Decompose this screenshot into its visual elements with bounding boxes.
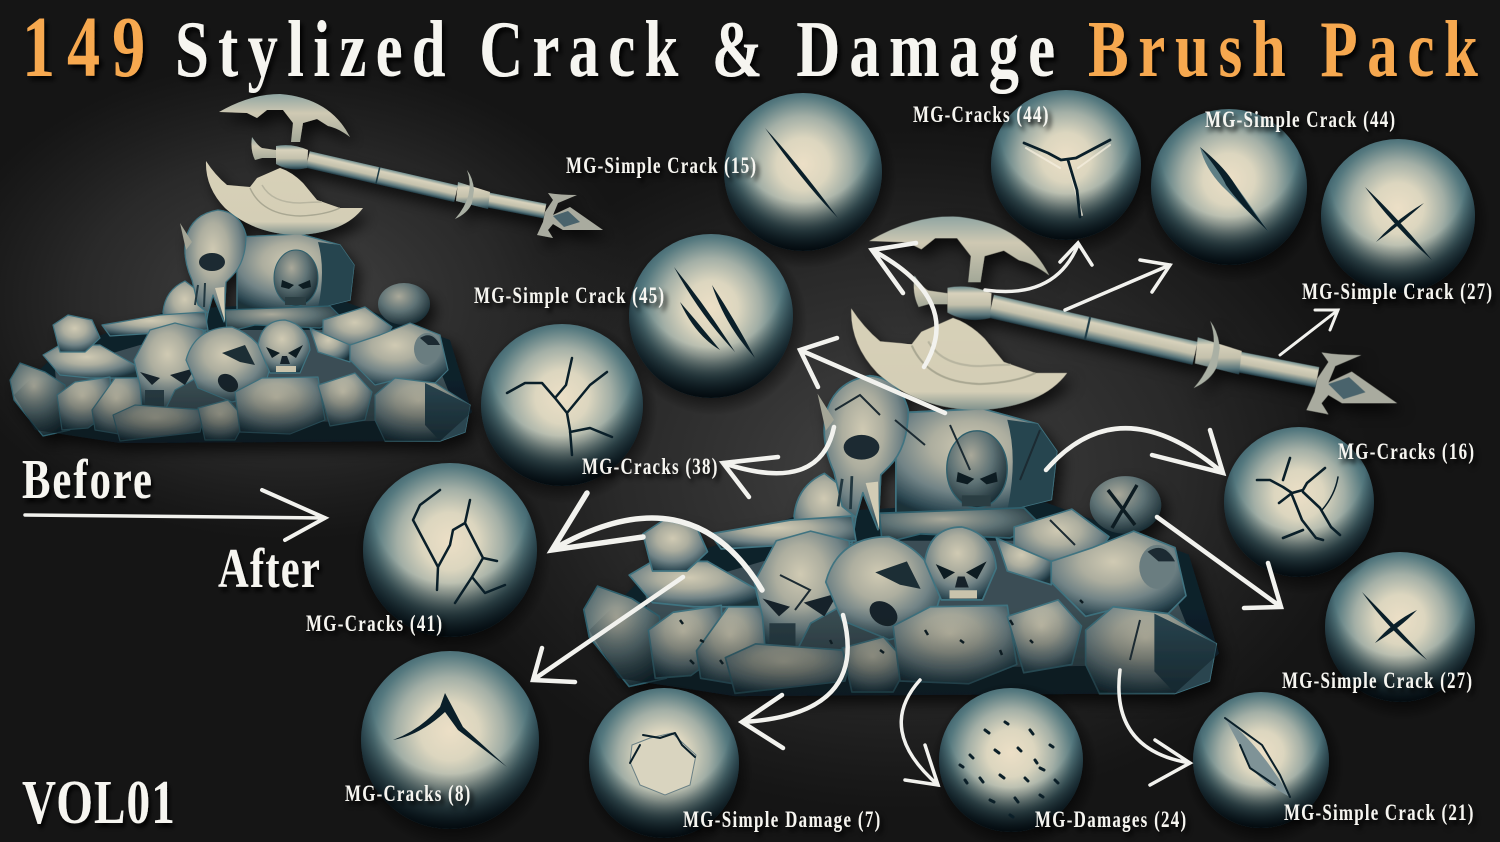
brush labels: MG-Cracks (16) <box>1338 439 1474 465</box>
after model: axe and skull pile with damage <box>584 216 1397 696</box>
sphere: cracks 41 <box>355 459 551 655</box>
sphere: simple crack 44 <box>1143 104 1321 282</box>
brush labels <box>306 102 1492 833</box>
sphere: simple damage 7 <box>582 684 752 842</box>
sphere: cracks 38 <box>473 319 657 503</box>
brush labels: MG-Simple Crack (27) <box>1282 668 1472 694</box>
brush labels: MG-Simple Damage (7) <box>683 807 880 833</box>
title: Stylized Crack & Damage <box>175 6 1055 94</box>
sphere: simple crack 15 <box>716 88 896 268</box>
sphere: cracks 16 <box>1216 422 1388 594</box>
volume label: VOL01 <box>22 768 175 837</box>
title: 149 <box>22 0 145 95</box>
sphere: cracks 44 <box>983 85 1155 257</box>
sphere: simple crack 21 <box>1185 687 1343 842</box>
brush labels: MG-Simple Crack (15) <box>566 153 756 179</box>
brush labels: MG-Simple Crack (44) <box>1205 107 1395 133</box>
brush labels: MG-Simple Crack (21) <box>1284 800 1473 826</box>
brush labels: MG-Damages (24) <box>1035 807 1186 833</box>
brush labels: MG-Simple Crack (45) <box>474 283 664 309</box>
before to after arrow <box>25 490 325 540</box>
brush labels: MG-Cracks (8) <box>345 781 470 807</box>
sphere: damages 24 <box>931 683 1097 842</box>
brush labels: MG-Cracks (44) <box>913 102 1048 128</box>
sphere: simple crack 27 lower <box>1317 547 1489 719</box>
before heading: Before <box>22 448 152 510</box>
sphere: simple crack 45 <box>621 229 807 415</box>
title: Brush Pack <box>1088 6 1478 94</box>
before model: axe and skull pile <box>10 94 603 443</box>
title <box>22 0 1478 95</box>
sphere: simple crack 27 upper <box>1313 134 1489 310</box>
sphere: cracks 8 <box>353 647 553 842</box>
brush labels: MG-Simple Crack (27) <box>1302 279 1492 305</box>
brush labels: MG-Cracks (41) <box>306 611 442 637</box>
after heading: After <box>218 537 320 599</box>
arrows from model to spheres <box>533 243 1338 785</box>
brush labels: MG-Cracks (38) <box>582 454 717 480</box>
